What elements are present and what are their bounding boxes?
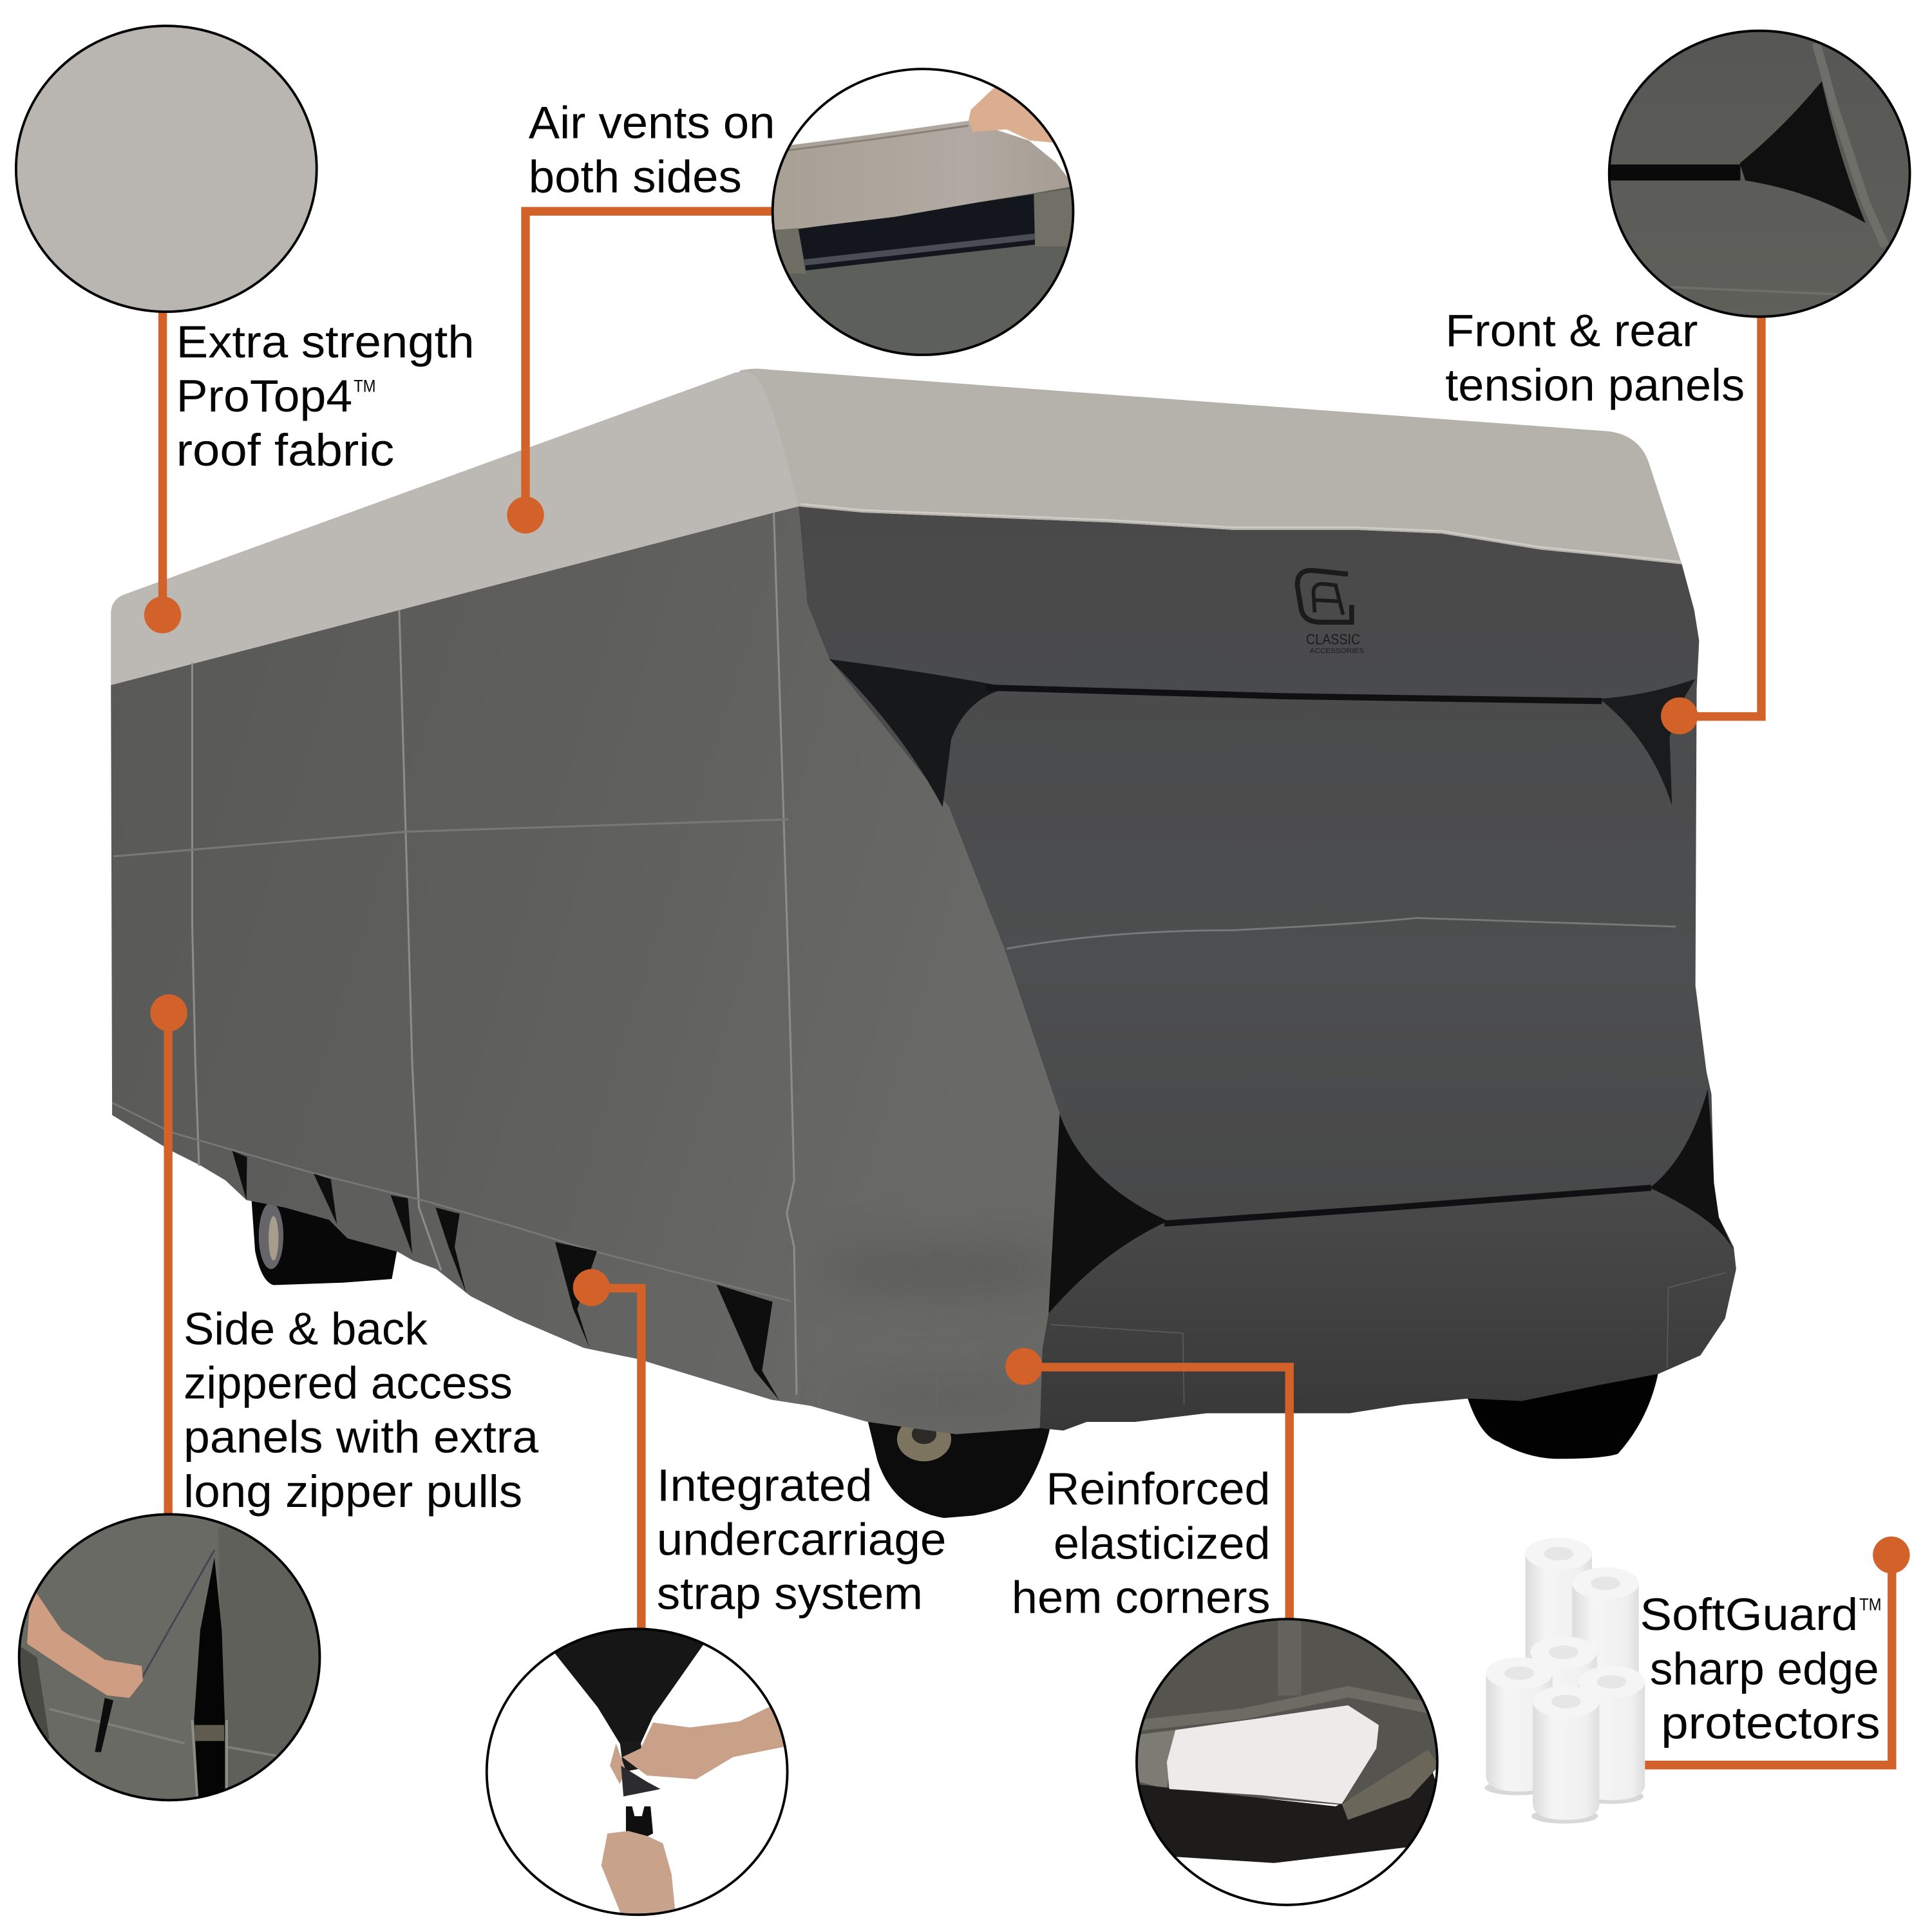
zipper opening [194,1557,225,1799]
strap band [620,1741,643,1772]
roof hem stitch [801,504,1681,562]
interior tan [194,1725,224,1741]
circle: roof fabric swatch [16,26,317,312]
label: hem corners: elasticized [1054,1518,1271,1569]
circle outline [1609,31,1910,317]
label: hem corners: hem corners [1012,1572,1271,1623]
tension panel lower left [1048,1114,1168,1314]
circle outline [1137,1619,1437,1905]
roof panel front [739,368,1682,564]
elastic hem [1141,1692,1428,1725]
circle: air vent detail [764,62,1084,363]
label: SoftGuard: protectors [1661,1698,1880,1749]
connector: edge protectors [1645,1537,1910,1769]
tension panel upper left [829,659,1010,807]
lower stitching [1669,287,1842,294]
side panel shading [871,1248,1030,1290]
label: air vents [529,97,775,202]
hem stitching along the side [112,1103,791,1301]
label: roof fabric [176,317,475,476]
label: undercarriage strap [657,1460,946,1620]
circle: tension panel detail [1602,24,1916,327]
upper buckle [621,1766,661,1797]
lifted flap [766,121,1074,231]
front wheel [866,1414,1052,1518]
vent surround left [775,229,806,273]
hem corner stitching [936,1273,1725,1411]
label: tension panels [1445,306,1745,411]
icon: SoftGuard foam rollers [1484,1538,1645,1824]
zipper pull [95,1698,113,1752]
connector: hem corners [1005,1348,1294,1622]
upper hand [622,1705,788,1779]
label: hem corners: Reinforced [1046,1464,1271,1515]
label: roof fabric: Extra strength [176,317,475,368]
label: zippered access panels: Side & back [184,1303,428,1354]
left thumb [610,1743,626,1784]
logo: Classic Accessories: ACCESSORIES [1310,647,1364,655]
label: tension panels: tension panels [1445,360,1745,411]
label: roof fabric: TM [354,376,376,395]
illustration: covered motorhome [111,368,1736,1518]
label: zippered access panels [184,1303,539,1517]
side seams [113,513,797,1395]
label: SoftGuard: sharp edge [1650,1643,1879,1694]
label: tension panels: Front & rear [1445,306,1698,357]
lower bumper panel [1040,1188,1736,1430]
connector: air vents [507,207,773,533]
roof panel side [111,372,799,685]
tension panel lower right [1650,1089,1734,1251]
vent surround right [1034,189,1074,247]
circle: zipper detail [12,1510,327,1805]
connector: undercarriage strap [573,1269,646,1629]
rear wheel [251,1193,399,1285]
label: SoftGuard: SoftGuard [1640,1589,1858,1640]
strap [1610,164,1740,180]
label: roof fabric: roof fabric [176,425,394,476]
zipper line [142,1550,214,1678]
front panel seam [1007,918,1676,949]
white lining [1167,1705,1379,1804]
label: undercarriage strap: undercarriage [657,1515,946,1566]
arm [27,1584,143,1698]
hand [969,88,1057,143]
cover left flap [1136,1730,1175,1789]
label: air vents: Air vents on [529,97,775,148]
tension panel upper right [1599,679,1696,806]
vent stitch band [804,236,1035,263]
connector: tension panels [1661,317,1766,734]
logo: Classic Accessories: CLASSIC [1306,631,1360,648]
flap stitching [788,126,969,150]
upper fabric [1128,1614,1448,1805]
circle outline [487,1629,788,1915]
label: zippered access panels: long zipper pulls [184,1466,522,1517]
undercarriage strap gussets [232,1151,779,1400]
tension strap lower [1164,1188,1651,1224]
hem seam [50,1709,283,1757]
vent mesh [799,194,1035,270]
black gusset [1740,81,1866,223]
label: hem corners [1012,1464,1271,1623]
lower fabric [784,187,1072,354]
label: air vents: both sides [529,151,742,202]
black frame [1136,1757,1439,1863]
slit hem [192,1720,227,1797]
circle outline [19,1514,319,1800]
label: SoftGuard [1640,1589,1882,1749]
cover front panel [799,506,1736,1430]
label: SoftGuard: TM [1859,1595,1882,1615]
lower hand [601,1831,675,1917]
right flap [218,1527,327,1805]
logo: Classic Accessories [1298,571,1364,655]
label: zippered access panels: zippered access [184,1358,513,1409]
connector: zippered access [150,994,187,1518]
lower buckle [626,1806,653,1847]
tension strap upper [986,688,1602,701]
circle: strap buckle detail [480,1624,795,1920]
connector: roof fabric [144,312,181,633]
circle: hem corner detail [1128,1614,1448,1910]
right front wheel [1465,1365,1660,1459]
label: undercarriage strap: Integrated [657,1460,873,1511]
label: zippered access panels: panels with extra [184,1412,539,1463]
metal rail [1342,1750,1439,1820]
seam [1816,43,1885,247]
black gusset [542,1624,721,1743]
label: roof fabric: ProTop4 [176,371,352,422]
circle outline [773,69,1073,355]
left dark edge [12,1641,50,1750]
label: undercarriage strap: strap system [657,1569,923,1620]
cover side panel [111,506,1059,1434]
vertical seam [1278,1619,1301,1696]
